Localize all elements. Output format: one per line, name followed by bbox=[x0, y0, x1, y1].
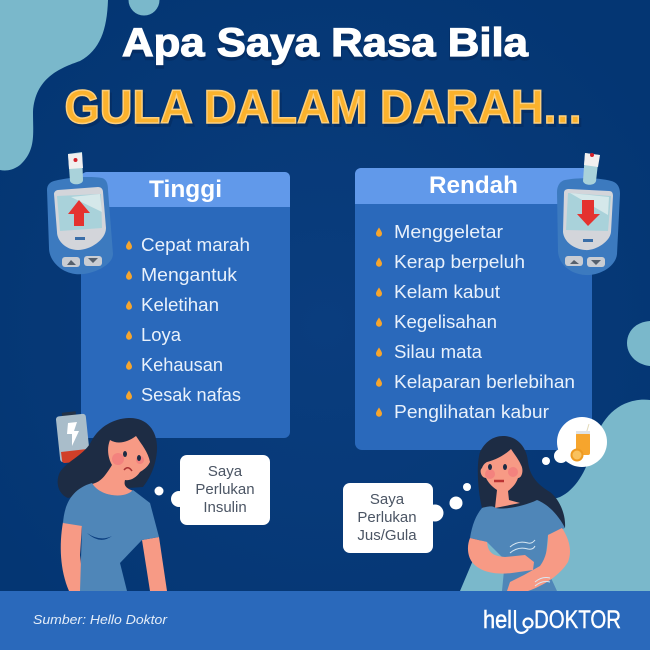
illustration: woman low sugar bbox=[468, 436, 570, 591]
speech bubble: Saya Perlukan Insulin bbox=[154, 455, 270, 525]
list: Rendah symptoms bbox=[376, 221, 575, 422]
logo: Hello Doktor bbox=[483, 606, 621, 634]
title: Apa Saya Rasa Bila bbox=[122, 21, 529, 65]
list: Tinggi symptoms: Loya bbox=[141, 324, 182, 345]
speech bubble: Saya Perlukan Insulin: Saya bbox=[208, 463, 243, 480]
title: Apa Saya Rasa Bila bbox=[122, 24, 529, 68]
neck and face bbox=[92, 436, 150, 496]
hair bbox=[478, 436, 565, 528]
footer bar bbox=[0, 591, 650, 650]
shirt bbox=[470, 500, 565, 591]
illustration: woman high sugar bbox=[58, 418, 167, 591]
panel header: Tinggi: Tinggi bbox=[149, 176, 222, 203]
source note: Sumber: Hello Doktor bbox=[33, 612, 168, 627]
list: Rendah symptoms: Kerap berpeluh bbox=[394, 251, 525, 272]
icon: glucose meter high bbox=[47, 152, 113, 274]
list: Tinggi symptoms bbox=[126, 234, 250, 405]
panel header: Rendah bbox=[355, 168, 592, 204]
speech bubble: Saya Perlukan Jus/Gula: Saya bbox=[370, 491, 405, 508]
list: Rendah symptoms: Kegelisahan bbox=[394, 311, 497, 332]
hair bbox=[58, 418, 157, 498]
subtitle: GULA DALAM DARAH... bbox=[66, 83, 584, 136]
subtitle: GULA DALAM DARAH... bbox=[64, 80, 582, 133]
list: Rendah symptoms: Menggeletar bbox=[394, 221, 503, 242]
list: Rendah symptoms: Silau mata bbox=[394, 341, 483, 362]
blob: bottom right bbox=[460, 400, 650, 591]
blob: right middle bbox=[627, 321, 650, 366]
arms bbox=[61, 522, 84, 591]
panel header: Tinggi bbox=[81, 172, 290, 207]
list: Tinggi symptoms: Keletihan bbox=[141, 294, 219, 315]
thought bubble: juice and orange bbox=[542, 417, 607, 467]
panel: Rendah bbox=[355, 168, 592, 450]
list: Tinggi symptoms: Kehausan bbox=[141, 354, 223, 375]
speech bubble: Saya Perlukan Jus/Gula bbox=[343, 483, 471, 553]
icon: glucose meter low bbox=[557, 153, 620, 275]
logo: Hello Doktor: DOKTOR bbox=[534, 606, 621, 634]
speech bubble: Saya Perlukan Insulin: Insulin bbox=[203, 499, 247, 516]
list: Rendah symptoms: Penglihatan kabur bbox=[394, 401, 549, 422]
speech bubble: Saya Perlukan Jus/Gula: Perlukan bbox=[357, 509, 417, 526]
icon: low battery bbox=[56, 411, 90, 463]
shirt bbox=[63, 483, 159, 591]
arms bbox=[468, 538, 534, 574]
list: Rendah symptoms: Kelaparan berlebihan bbox=[394, 371, 575, 392]
list: Tinggi symptoms: Mengantuk bbox=[141, 264, 238, 285]
list: Tinggi symptoms: Cepat marah bbox=[141, 234, 250, 255]
panel: Tinggi bbox=[81, 172, 290, 438]
list: Tinggi symptoms: Sesak nafas bbox=[141, 384, 241, 405]
logo: Hello Doktor: hel bbox=[483, 606, 512, 634]
blob: top left bbox=[0, 0, 160, 170]
speech bubble: Saya Perlukan Jus/Gula: Jus/Gula bbox=[357, 527, 417, 544]
speech bubble: Saya Perlukan Insulin: Perlukan bbox=[195, 481, 255, 498]
panel header: Rendah: Rendah bbox=[429, 172, 518, 199]
face bbox=[481, 449, 522, 508]
list: Rendah symptoms: Kelam kabut bbox=[394, 281, 500, 302]
